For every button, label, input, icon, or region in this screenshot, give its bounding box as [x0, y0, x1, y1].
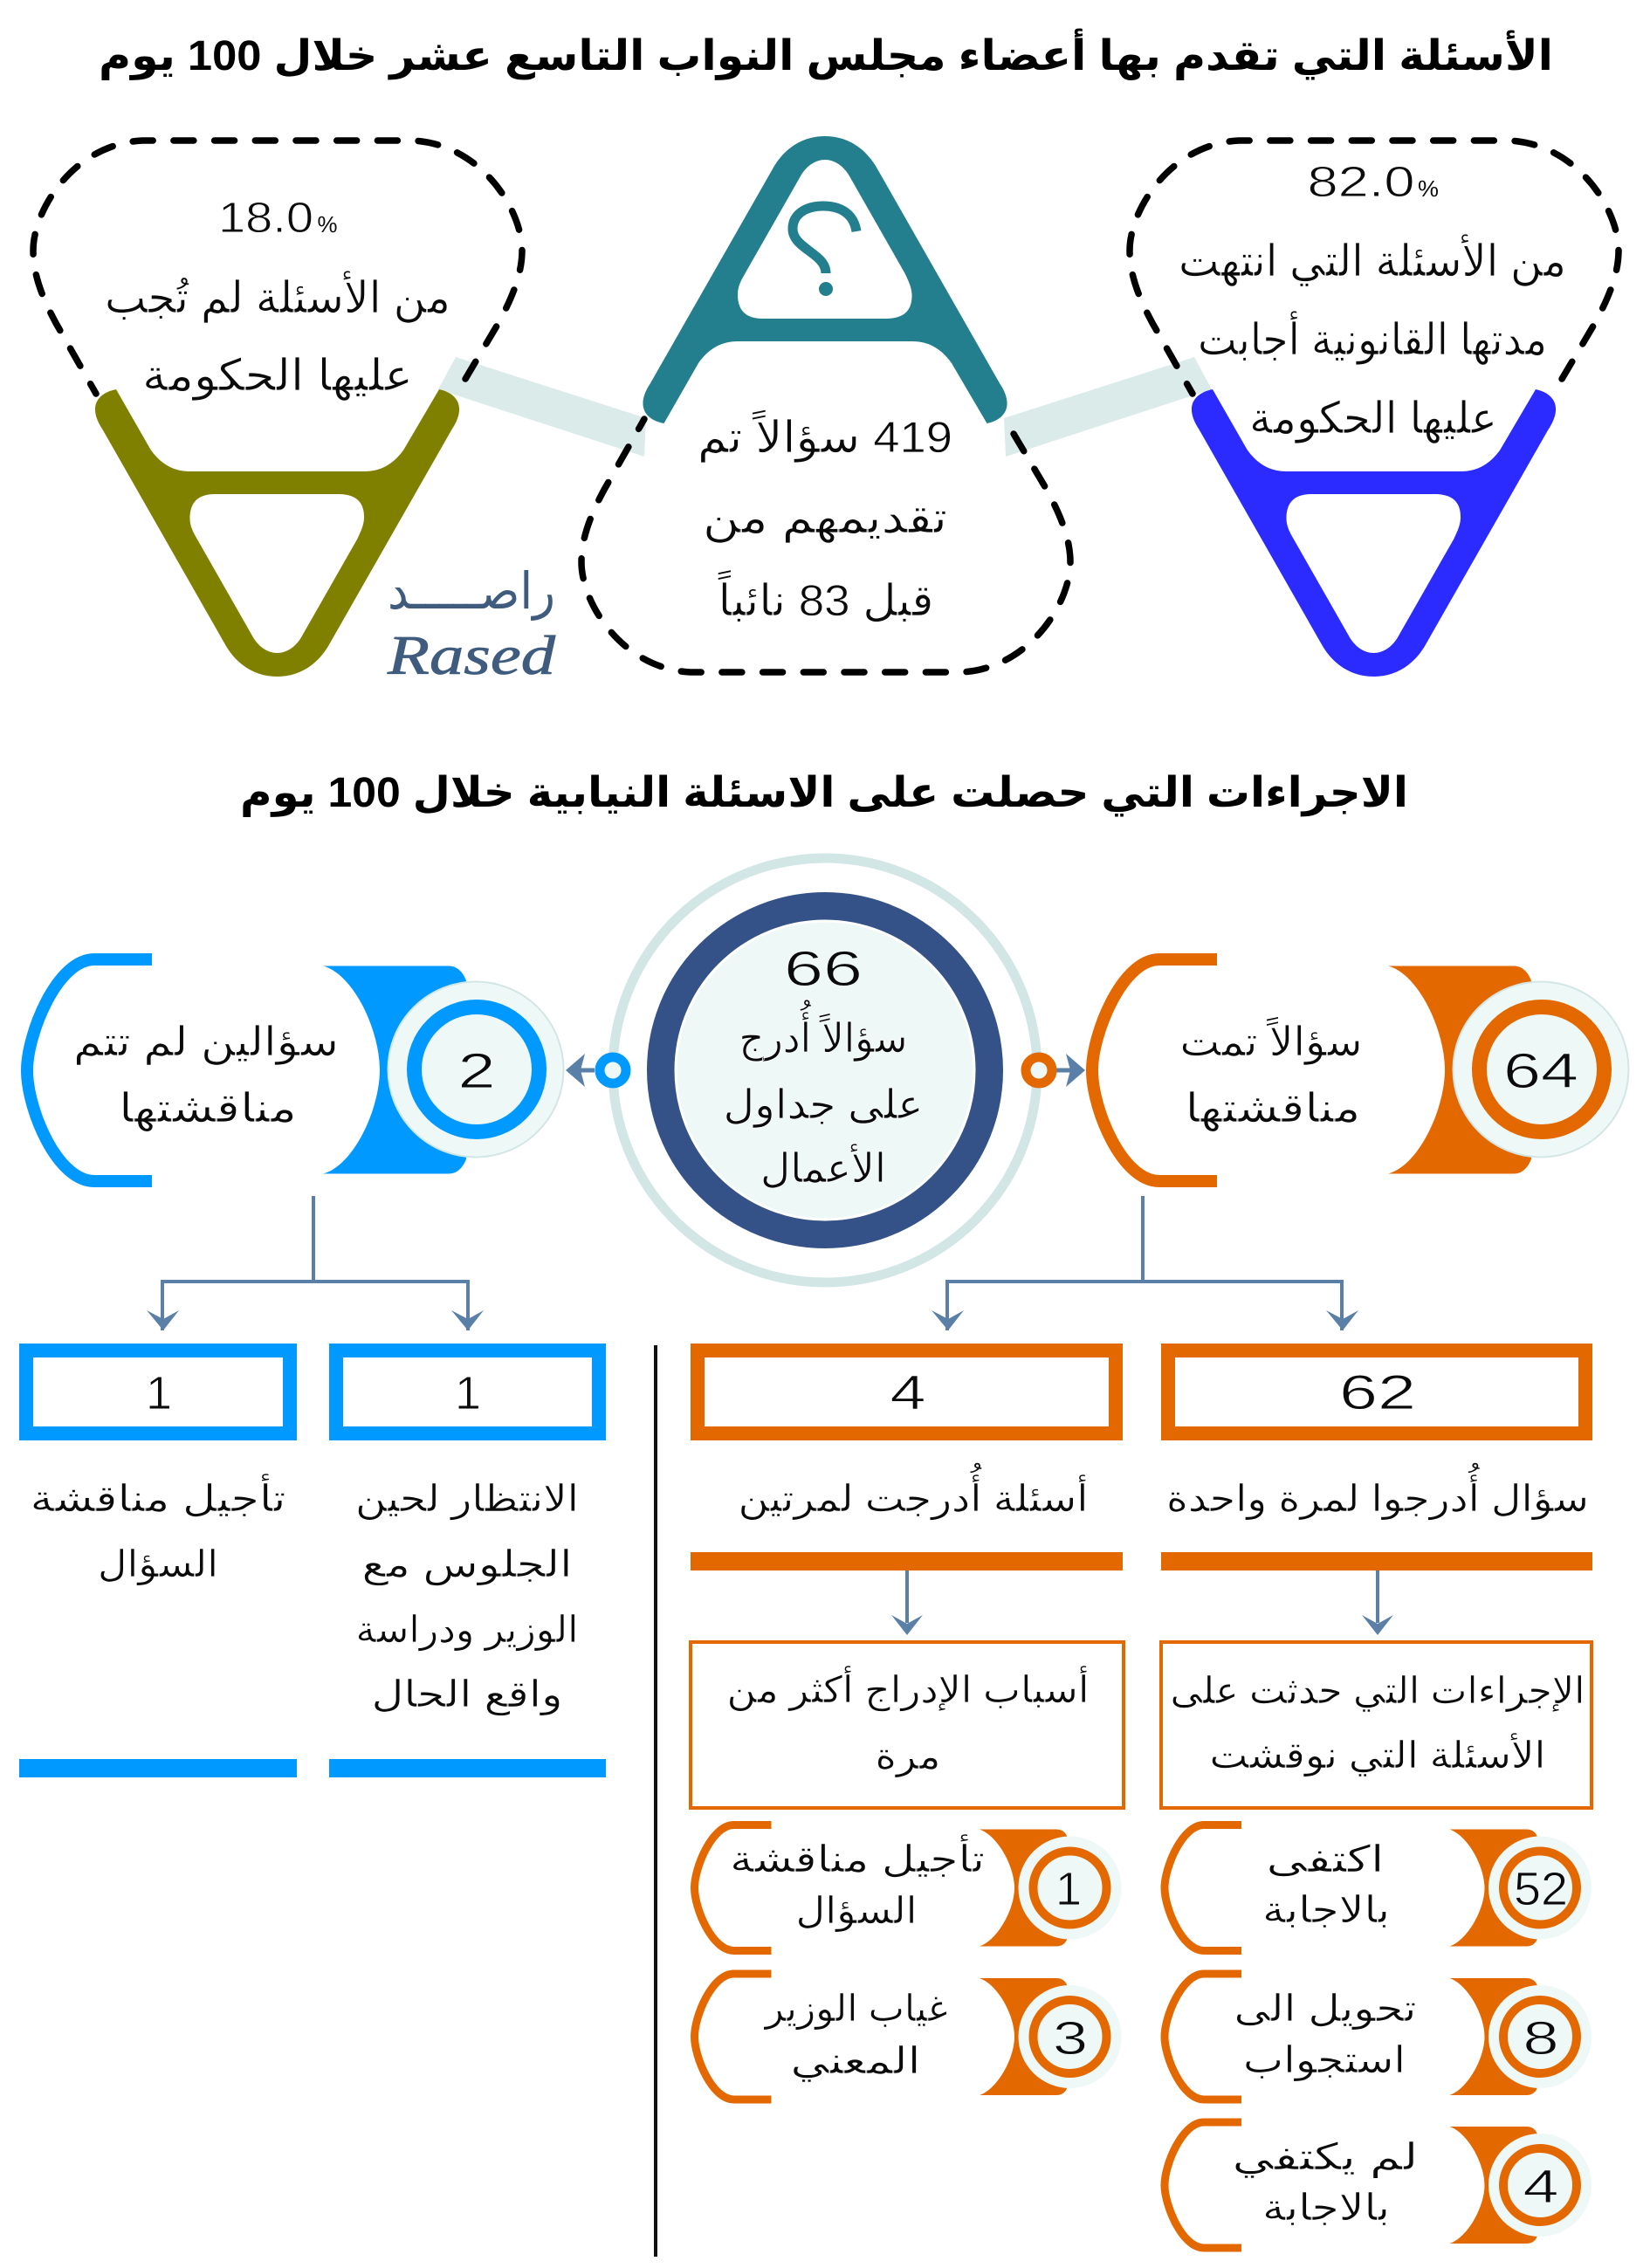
value: 4 — [1523, 2161, 1559, 2213]
column divider — [654, 1345, 657, 2257]
text line: غياب الوزير — [763, 1988, 948, 2030]
text line: قبل 83 نائباً — [718, 569, 934, 625]
shape: olive triangle — [95, 389, 459, 677]
text line: واقع الحال — [372, 1674, 562, 1716]
value: 66 — [784, 941, 863, 997]
small pill: interrogation 8 — [1165, 1974, 1592, 2100]
arrow — [1362, 1570, 1393, 1635]
text line: الوزير ودراسة — [356, 1609, 578, 1651]
value: 52 — [1514, 1863, 1568, 1915]
panel: answered share — [1130, 141, 1619, 677]
small pill: minister absent 3 — [695, 1974, 1121, 2100]
dashed outline: centre — [581, 419, 1070, 672]
value: 82.0 percent: 82.0 — [1308, 159, 1414, 206]
connector band: right — [1004, 357, 1212, 457]
text line: على جداول — [723, 1082, 924, 1129]
arrow — [891, 1570, 923, 1635]
arrow tree: left — [147, 1196, 484, 1330]
text line: تحويل الى — [1234, 1988, 1416, 2030]
big pill: not discussed 2 — [27, 959, 564, 1181]
text line: 419 سؤالاً تم — [698, 409, 952, 463]
value: 18.0 percent: 18.0 — [218, 195, 313, 242]
logo arabic: راصـــــد — [388, 563, 555, 621]
text line: السؤال — [98, 1543, 218, 1585]
text line: بالاجابة — [1262, 1889, 1390, 1930]
small pill: postpone 1 — [695, 1825, 1121, 1950]
arrow tree: right — [932, 1196, 1358, 1330]
box: reasons — [691, 1642, 1124, 1808]
text line: تأجيل مناقشة — [730, 1833, 985, 1880]
logo latin: Rased — [387, 624, 556, 686]
text line: الانتظار لحين — [355, 1478, 579, 1520]
box: actions — [1161, 1642, 1592, 1808]
icon: question mark — [793, 206, 856, 296]
connector band: left — [438, 357, 646, 457]
text line: سؤالاً تمت — [1180, 1016, 1362, 1066]
text line: الإجراءات التي حدثت على — [1170, 1670, 1585, 1713]
percent sign: % — [318, 211, 337, 237]
text line: من الأسئلة لم تُجب — [105, 271, 450, 323]
text line: الأعمال — [760, 1143, 886, 1191]
text line: سؤال أُدرجوا لمرة واحدة — [1166, 1463, 1589, 1520]
text line: تقديمهم من — [703, 493, 947, 544]
text line: من الأسئلة التي انتهت — [1179, 234, 1566, 287]
small pill: not satisfied 4 — [1165, 2122, 1592, 2248]
column: postpone discussion — [19, 1350, 297, 1777]
text line: أسباب الإدراج أكثر من — [726, 1666, 1090, 1711]
value: 8 — [1523, 2012, 1559, 2065]
value: 1 — [455, 1367, 481, 1419]
small pill: satisfied 52 — [1165, 1825, 1592, 1950]
marker: left arrow — [566, 1054, 626, 1087]
central circle: 66 questions — [613, 858, 1037, 1282]
shape: blue triangle — [1192, 389, 1556, 677]
value: 2 — [457, 1043, 496, 1099]
value: 62 — [1339, 1364, 1416, 1419]
text line: السؤال — [796, 1890, 917, 1932]
value: 1 — [1055, 1863, 1082, 1915]
text line: مناقشتها — [1186, 1085, 1360, 1131]
column: waiting for minister — [329, 1350, 606, 1777]
text line: سؤالاً أُدرج — [739, 1000, 908, 1062]
logo: Rased — [387, 563, 556, 686]
text line: تأجيل مناقشة — [30, 1473, 286, 1519]
dashed outline: left — [33, 141, 522, 394]
text line: لم يكتفي — [1233, 2136, 1418, 2179]
panel: unanswered share — [33, 141, 522, 677]
column: listed once — [1161, 1350, 1592, 1808]
text line: المعني — [791, 2040, 920, 2083]
text line: بالاجابة — [1262, 2187, 1390, 2228]
text line: عليها الحكومة — [1249, 394, 1497, 444]
value: 4 — [890, 1364, 925, 1419]
title: actions on questions: الاجراءات التي حصلت على الاسئلة النيابية خلال 100 يوم — [240, 770, 1408, 817]
shape: teal triangle — [643, 136, 1007, 423]
text line: اكتفى — [1266, 1838, 1385, 1880]
text line: الأسئلة التي نوقشت — [1210, 1732, 1545, 1777]
value: 64 — [1503, 1043, 1578, 1099]
text line: عليها الحكومة — [142, 351, 413, 402]
text line: استجواب — [1243, 2039, 1406, 2081]
panel: total questions — [581, 136, 1070, 672]
text line: مناقشتها — [119, 1085, 297, 1131]
big pill: discussed 64 — [1092, 959, 1629, 1181]
title: questions submitted: الأسئلة التي تقدم بها أعضاء مجلس النواب التاسع عشر خلال 100 يوم — [99, 28, 1553, 80]
text line: سؤالين لم تتم — [73, 1019, 339, 1066]
text line: أسئلة أُدرجت لمرتين — [739, 1463, 1088, 1520]
text line: مدتها القانونية أجابت — [1198, 311, 1547, 366]
text line: الجلوس مع — [361, 1543, 573, 1586]
value: 1 — [146, 1367, 172, 1419]
column: listed twice — [691, 1350, 1124, 1808]
percent sign: % — [1418, 175, 1439, 202]
dashed outline: right — [1130, 141, 1619, 394]
marker: right arrow — [1026, 1054, 1085, 1087]
value: 3 — [1053, 2012, 1088, 2065]
text line: مرة — [875, 1735, 941, 1777]
